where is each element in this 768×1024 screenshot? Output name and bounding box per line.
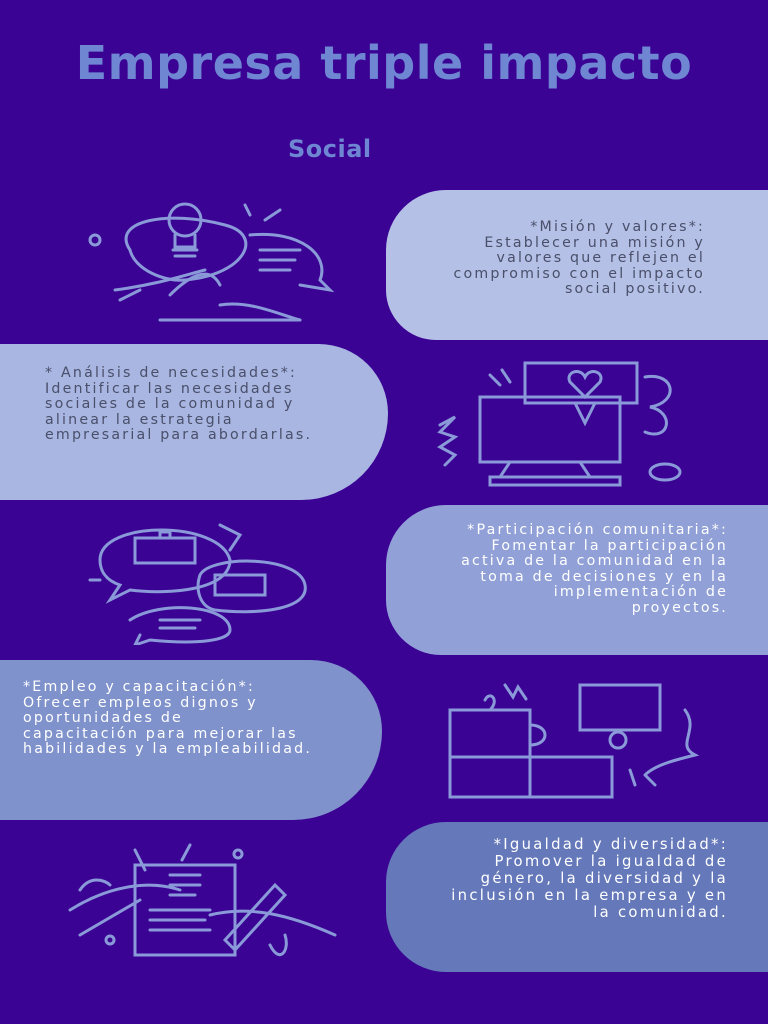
panel: participacion: Fomentar la participación	[491, 538, 728, 554]
icon: writing hand	[68, 843, 336, 956]
panel: analisis: Identificar las necesidades	[45, 381, 294, 397]
panel: mision	[386, 190, 768, 340]
panel: empleo: habilidades y la empleabilidad.	[23, 741, 312, 757]
panel: participacion	[386, 505, 768, 655]
panel: participacion: implementación de	[554, 584, 728, 600]
panel: igualdad	[386, 822, 768, 972]
panel: empleo: Ofrecer empleos dignos y	[23, 695, 258, 711]
panel: participacion: *Participación comunitaria*:	[467, 522, 728, 538]
icon: computer heart	[437, 362, 682, 486]
panel: mision: compromiso con el impacto	[453, 266, 705, 282]
panel: analisis	[0, 344, 388, 500]
panel: analisis: alinear la estrategia	[45, 412, 234, 428]
panel: mision: Establecer una misión y	[484, 235, 705, 251]
panel: empleo: oportunidades de	[23, 710, 183, 726]
panel: empleo	[0, 660, 382, 820]
panel: igualdad: inclusión en la empresa y en	[451, 887, 728, 904]
icon: lightbulb hands	[88, 202, 334, 322]
panel: igualdad: género, la diversidad y la	[481, 870, 728, 887]
panel: participacion: toma de decisiones y en la	[480, 569, 728, 585]
panel: analisis: empresarial para abordarlas.	[45, 427, 312, 443]
subtitle: Social: Social	[288, 135, 372, 163]
panel: igualdad: Promover la igualdad de	[495, 853, 728, 870]
panel: empleo: capacitación para mejorar las	[23, 726, 298, 742]
panel: igualdad: la comunidad.	[593, 904, 728, 921]
panel: igualdad: *Igualdad y diversidad*:	[494, 836, 728, 853]
panel: participacion: proyectos.	[632, 600, 728, 616]
panel: analisis: * Análisis de necesidades*:	[45, 365, 297, 381]
panel: participacion: activa de la comunidad en la	[461, 553, 728, 569]
icon: briefcases chat	[88, 523, 307, 645]
panel: mision: social positivo.	[565, 281, 705, 297]
panel: mision: valores que reflejen el	[497, 250, 705, 266]
title: Empresa triple impacto	[76, 36, 692, 90]
icon: puzzle	[448, 683, 700, 798]
panel: empleo: *Empleo y capacitación*:	[23, 679, 255, 695]
panel: analisis: sociales de la comunidad y	[45, 396, 295, 412]
panel: mision: *Misión y valores*:	[530, 219, 705, 235]
